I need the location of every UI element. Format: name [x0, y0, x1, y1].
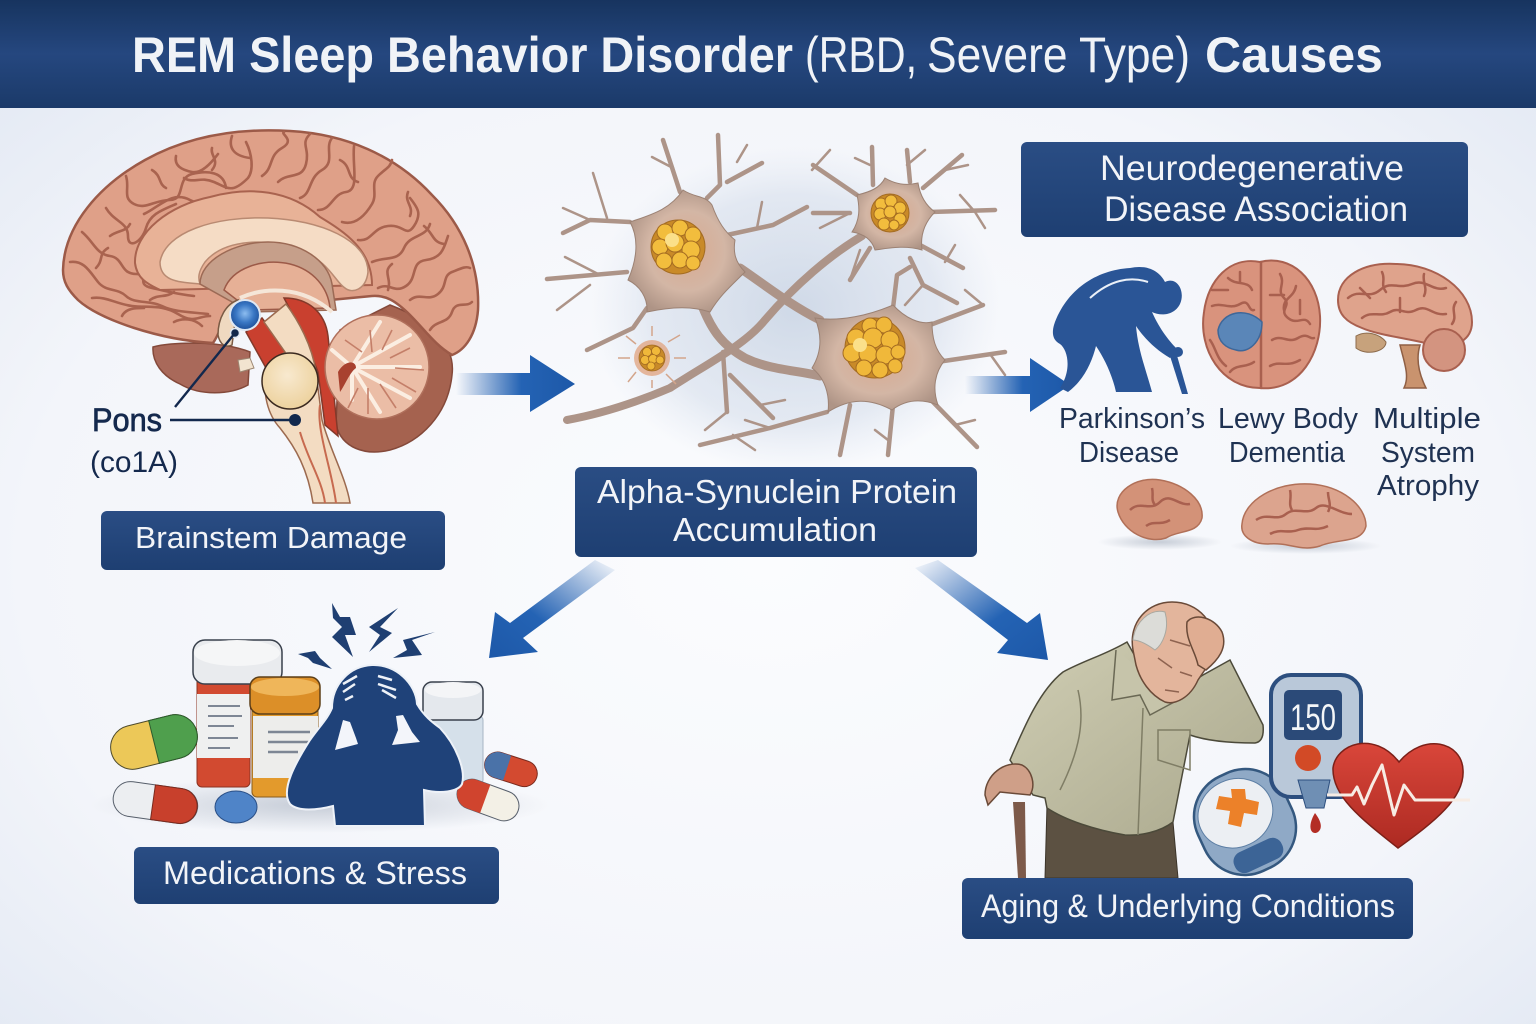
- medicine bottle: orange: [250, 677, 320, 797]
- title: REM Sleep Behavior Disorder: [132, 27, 793, 83]
- arrow: protein to neurodegenerative diseases: [965, 358, 1070, 412]
- stress lightning bolts: [298, 603, 435, 669]
- cerebellum outer crescent: [336, 305, 452, 452]
- icon: brain cross-section: [63, 130, 478, 503]
- cerebral folds: [70, 132, 472, 330]
- label: parkinson's disease: Disease: [1079, 437, 1179, 469]
- title: Causes: [1205, 27, 1383, 83]
- icon: glucose meter reading 150: [1271, 675, 1361, 833]
- lobe band: [135, 191, 372, 290]
- title: Severe Type): [927, 27, 1190, 83]
- pons leader lines: [170, 333, 295, 420]
- arrow: protein to medications: [489, 560, 615, 658]
- arrow: brainstem to protein: [456, 355, 575, 412]
- neuron processes: [547, 135, 1005, 455]
- label: brainstem damage: [101, 511, 445, 570]
- protein cluster 1: [651, 220, 705, 274]
- hand on head: [1187, 617, 1224, 670]
- icon: small atrophied brain: [1098, 479, 1222, 550]
- label: lewy body dementia: Dementia: [1229, 437, 1346, 469]
- stressed person silhouette: [287, 665, 463, 826]
- protein cluster 3: [843, 317, 905, 378]
- label: medications and stress: [134, 847, 499, 904]
- arrow: protein to aging: [915, 560, 1048, 660]
- label: brainstem damage: Brainstem Damage: [135, 520, 407, 555]
- icon: pills, bottles and stressed person: [90, 603, 550, 833]
- label: alpha-synuclein: Accumulation: [673, 511, 877, 548]
- trousers: [1045, 805, 1178, 878]
- head: [1132, 602, 1215, 703]
- neuron body 4: [618, 326, 686, 388]
- neuron body 3: [812, 305, 945, 412]
- icon: side-view brain with stem: [1338, 264, 1472, 388]
- protein cluster 4: [639, 345, 665, 371]
- pons bulge: [262, 353, 318, 409]
- capsule: white red: [111, 779, 200, 826]
- label: alpha-synuclein: [575, 467, 977, 557]
- label: lewy body dementia: Lewy Body: [1218, 403, 1358, 435]
- medicine bottle: red: [193, 640, 282, 787]
- anterior small structures: [218, 300, 238, 346]
- icon: small side brain: [1230, 484, 1382, 554]
- icon: older man with cane: [985, 602, 1263, 878]
- panel: neurodegenerative disease association: [1021, 142, 1481, 554]
- icon: heart with pulse: [1327, 743, 1470, 848]
- cerebrum: [63, 130, 478, 355]
- pons label: Pons: [92, 402, 162, 438]
- heading: [1021, 142, 1468, 237]
- icon: stooped person with cane: [1053, 267, 1188, 394]
- red tracts: [246, 318, 288, 368]
- label: aging and underlying conditions: Aging & Underlying Conditions: [981, 888, 1395, 924]
- cane: [1013, 802, 1026, 878]
- capsule: yellow green: [106, 710, 202, 774]
- label: multiple system atrophy: Multiple: [1373, 403, 1481, 435]
- brainstem: [264, 304, 350, 503]
- panel: brainstem damage: [63, 130, 478, 570]
- capsule: right red: [481, 749, 541, 790]
- cerebellum: [325, 315, 429, 419]
- protein cluster 2: [871, 194, 909, 232]
- heading: Neurodegenerative: [1100, 149, 1404, 188]
- lower frontal lobe: [153, 343, 250, 393]
- label: parkinson's disease: Parkinson’s: [1059, 403, 1205, 435]
- hand on cane: [985, 764, 1033, 805]
- panel: alpha-synuclein protein: [547, 135, 1005, 557]
- header banner: [0, 0, 1536, 108]
- face details: [1158, 640, 1192, 692]
- label: multiple system atrophy: System: [1381, 437, 1475, 469]
- label: multiple system atrophy: Atrophy: [1377, 470, 1479, 502]
- pill: blue: [215, 791, 257, 823]
- icon: neurons with protein clumps: [547, 135, 1005, 475]
- thalamus region: [200, 242, 336, 312]
- icon: first-aid device: [1180, 755, 1310, 889]
- title: (RBD,: [805, 27, 917, 83]
- label: alpha-synuclein: Alpha-Synuclein Protein: [597, 473, 957, 510]
- pons label: (co1A): [90, 446, 178, 479]
- label: medications and stress: Medications & Stress: [163, 855, 467, 891]
- gaps between arms and head: [335, 715, 420, 750]
- heading: Disease Association: [1104, 190, 1408, 229]
- capsule: lower right: [453, 775, 523, 825]
- medicine bottle: white: [423, 682, 483, 784]
- icon: brain with lewy body region: [1203, 261, 1320, 388]
- pons marker: [230, 300, 260, 330]
- shirt: [1010, 642, 1263, 835]
- panel: aging and underlying conditions: [962, 602, 1470, 939]
- neuron body 1: [628, 190, 745, 312]
- hair: [1133, 611, 1167, 650]
- panel: medications and stress: [90, 603, 550, 904]
- neuron body 2: [852, 178, 935, 250]
- icon: glucose meter reading 150: 150: [1290, 697, 1336, 738]
- label: aging and underlying conditions: [962, 878, 1413, 939]
- corpus callosum: [160, 218, 368, 291]
